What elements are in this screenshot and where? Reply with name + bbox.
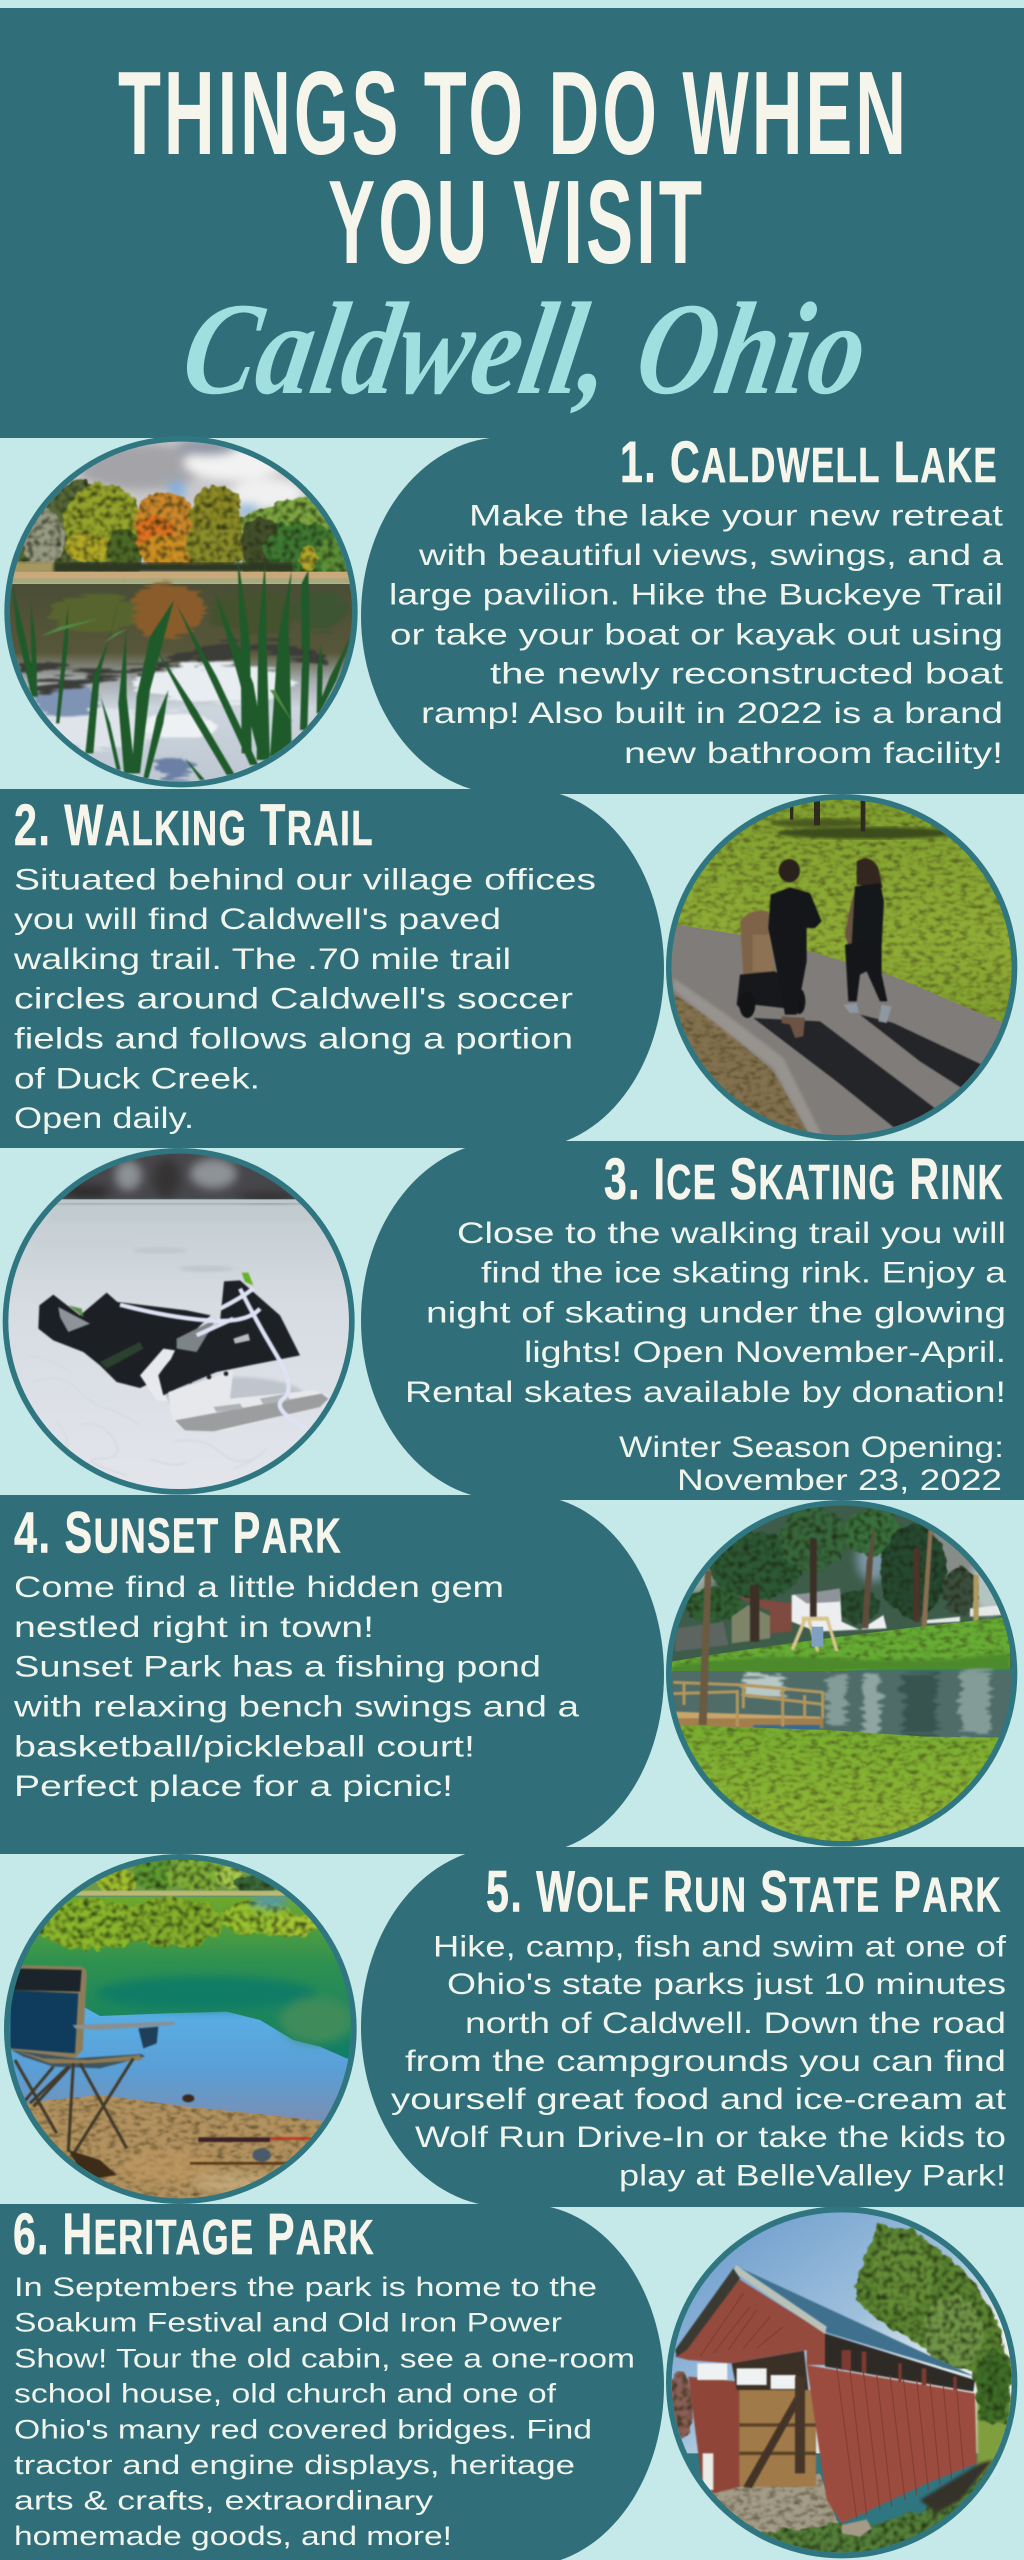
text: Heritage Park description: school house, old church and one of	[14, 2379, 557, 2409]
text: Caldwell Lake description: the newly reconstructed boat	[490, 658, 1003, 691]
text: Caldwell Lake description: ramp! Also built in 2022 is a brand	[421, 697, 1003, 730]
photo: Ice Skating Rink	[0, 1142, 367, 1509]
heading: Caldwell Lake: 1. CALDWELL LAKE	[620, 430, 998, 495]
text: Wolf Run State Park description	[391, 1931, 1007, 2193]
text: Walking Trail description: Situated behind our village offices	[14, 863, 596, 896]
text: Ice Skating Rink description: lights! Open November-April.	[524, 1336, 1006, 1369]
text: Walking Trail description: of Duck Creek.	[14, 1062, 260, 1096]
text: Caldwell Lake description: large pavilion. Hike the Buckeye Trail	[389, 579, 1003, 612]
text: Heritage Park description: arts & crafts, extraordinary	[14, 2485, 434, 2515]
text: Wolf Run State Park description: play at BelleValley Park!	[619, 2160, 1006, 2193]
text: Sunset Park description: basketball/pickleball court!	[14, 1730, 475, 1763]
heading: Heritage Park: 6. HERITAGE PARK	[13, 2202, 375, 2267]
text: Heritage Park description: In Septembers the park is home to the	[14, 2272, 597, 2302]
text: Wolf Run State Park description: Ohio's state parks just 10 minutes	[447, 1968, 1006, 2001]
title: YOU VISIT	[328, 156, 705, 289]
panel: 2. Walking Trail	[0, 789, 664, 1148]
text: Wolf Run State Park description: Wolf Run Drive-In or take the kids to	[415, 2121, 1006, 2154]
text: Walking Trail description: circles around Caldwell's soccer	[14, 983, 573, 1016]
panel: 4. Sunset Park	[0, 1495, 664, 1854]
text: Caldwell Lake description	[389, 500, 1004, 770]
photo: Wolf Run State Park	[0, 1850, 367, 2217]
text: Ice Skating Rink description: Rental skates available by donation!	[405, 1376, 1006, 1409]
text: Heritage Park description	[14, 2272, 635, 2551]
panel: 6. Heritage Park	[0, 2202, 664, 2560]
text: Ice Skating Rink description: night of skating under the glowing	[426, 1297, 1006, 1330]
panel: 3. Ice Skating Rink	[361, 1141, 1024, 1500]
text: Ice Skating Rink description: find the ice skating rink. Enjoy a	[481, 1257, 1007, 1290]
text: Walking Trail description: you will find Caldwell's paved	[14, 903, 501, 936]
text: Heritage Park description: tractor and engine displays, heritage	[14, 2450, 575, 2480]
text: Sunset Park description: Come find a little hidden gem	[14, 1571, 504, 1604]
script subtitle: Caldwell, Ohio	[173, 275, 879, 422]
text: Heritage Park description: Ohio's many red covered bridges. Find	[14, 2414, 592, 2444]
text: Heritage Park description: Show! Tour the old cabin, see a one-room	[14, 2343, 635, 2373]
photo: Sunset Park	[660, 1495, 1024, 1862]
text: Wolf Run State Park description: Hike, camp, fish and swim at one of	[433, 1931, 1007, 1964]
text: Sunset Park description: Sunset Park has a fishing pond	[14, 1650, 541, 1684]
text: Sunset Park description: with relaxing bench swings and a	[13, 1690, 580, 1724]
text: Ice Skating Rink description: Close to the walking trail you will	[457, 1217, 1006, 1250]
photo: Walking Trail	[660, 788, 1024, 1155]
text: winter season opening	[619, 1431, 1004, 1497]
text: Caldwell Lake description: new bathroom facility!	[624, 737, 1003, 770]
text: Caldwell Lake description: Make the lake your new retreat	[469, 500, 1003, 532]
heading: Wolf Run State Park: 5. WOLF RUN STATE PARK	[486, 1860, 1002, 1925]
text: winter season opening: Winter Season Opening:	[619, 1431, 1004, 1464]
text: Walking Trail description	[13, 863, 596, 1135]
text: Caldwell Lake description: with beautiful views, swings, and a	[418, 539, 1004, 572]
text: Sunset Park description	[13, 1571, 580, 1803]
text: winter season opening: November 23, 2022	[677, 1464, 1002, 1497]
text: Sunset Park description: Perfect place for a picnic!	[14, 1770, 453, 1803]
text: Ice Skating Rink description	[405, 1217, 1007, 1409]
heading: Walking Trail: 2. WALKING TRAIL	[14, 793, 374, 858]
photo: Caldwell Lake	[0, 430, 367, 791]
text: Walking Trail description: walking trail. The .70 mile trail	[13, 943, 511, 976]
panel: 5. Wolf Run State Park	[361, 1847, 1024, 2207]
text: Wolf Run State Park description: yourself great food and ice-cream at	[391, 2083, 1006, 2116]
title	[118, 47, 909, 289]
text: Sunset Park description: nestled right in town!	[14, 1611, 374, 1644]
text: Wolf Run State Park description: north of Caldwell. Down the road	[465, 2007, 1006, 2040]
panel: 1. Caldwell Lake	[361, 430, 1024, 794]
text: Heritage Park description: homemade goods, and more!	[14, 2521, 452, 2551]
photo: Heritage Park	[660, 2200, 1024, 2560]
heading: Ice Skating Rink: 3. ICE SKATING RINK	[604, 1147, 1004, 1212]
text: Walking Trail description: fields and follows along a portion	[14, 1023, 573, 1056]
text: Wolf Run State Park description: from the campgrounds you can find	[405, 2045, 1006, 2078]
heading: Sunset Park: 4. SUNSET PARK	[14, 1500, 342, 1566]
text: Caldwell Lake description: or take your boat or kayak out using	[390, 618, 1003, 651]
text: Walking Trail description: Open daily.	[14, 1102, 194, 1135]
text: Heritage Park description: Soakum Festival and Old Iron Power	[14, 2308, 562, 2338]
panel: header	[0, 8, 1024, 438]
